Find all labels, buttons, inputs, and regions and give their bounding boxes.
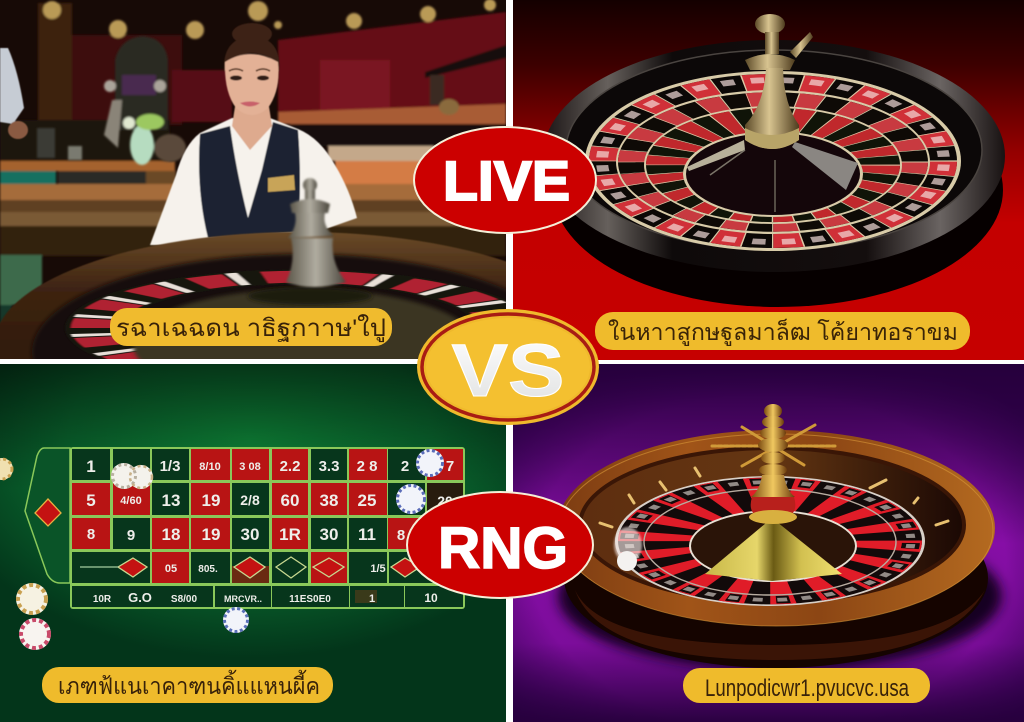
hair — [232, 22, 272, 41]
wheel base — [564, 488, 988, 668]
table numbers: 2.2 — [280, 458, 300, 475]
caption pill — [42, 667, 333, 703]
lamps — [43, 0, 496, 39]
panel: rng betting table on green — [0, 364, 506, 722]
dealer — [150, 23, 357, 246]
table numbers: 1/5 — [370, 563, 386, 575]
diamonds — [35, 499, 61, 526]
table numbers: 30 — [320, 525, 338, 544]
wheel shadow — [558, 522, 1002, 670]
table numbers: 30 — [241, 525, 259, 544]
caption pill — [110, 308, 392, 346]
caption pill — [683, 668, 930, 703]
table numbers: MRCVR.. — [224, 594, 262, 604]
table numbers: S8/00 — [171, 594, 198, 605]
table numbers: 3 08 — [239, 461, 261, 473]
badge: LIVE: LIVE — [443, 149, 570, 212]
table numbers: 1 — [86, 457, 96, 476]
decorative bottle stand — [37, 36, 186, 165]
table numbers: 2 — [401, 458, 409, 475]
wheel face — [585, 71, 961, 251]
badge: RNG — [407, 492, 593, 598]
table numbers: 5 — [86, 491, 96, 510]
badge: VS: VS — [452, 329, 564, 412]
caption pill: เภฑฟ้แนเาคาฑนคิ้แแหนผี้ค — [58, 670, 320, 699]
table numbers: 3.3 — [319, 458, 339, 475]
table numbers: G.O — [128, 590, 152, 605]
caption pill: ในหาาสูกษฐูลมาล็ฒ โค้ยาทอราขม — [608, 317, 958, 346]
table numbers: 10R — [93, 594, 112, 605]
shirt — [150, 118, 357, 246]
badge: RNG: RNG — [438, 516, 568, 581]
table numbers: 38 — [320, 491, 338, 510]
table numbers: 11 — [358, 525, 376, 544]
table numbers: 8 — [397, 527, 405, 544]
gold ticks — [600, 468, 948, 527]
table numbers: 2 8 — [357, 458, 377, 475]
table numbers: 9 — [127, 527, 135, 544]
table numbers: 19 — [202, 491, 220, 510]
table cells — [72, 449, 463, 607]
number ring — [95, 277, 505, 379]
wheel spindle — [286, 178, 346, 287]
caption pill — [595, 312, 970, 350]
table numbers: 20 — [437, 493, 453, 509]
table numbers: 13 — [162, 491, 180, 510]
table numbers: 8/10 — [199, 461, 221, 473]
panel: rng wheel on purple — [513, 364, 1024, 722]
table numbers: 25 — [358, 491, 376, 510]
badge: VS — [417, 309, 599, 425]
wheel face — [614, 476, 925, 606]
caption pill: รฉาเฉฉดน าธิฐกาาษ'ใปู — [116, 314, 386, 343]
table numbers: 1R — [279, 525, 301, 544]
table numbers: 11ES0E0 — [289, 594, 331, 605]
brass cone — [705, 518, 842, 581]
neck — [232, 100, 272, 150]
studio background — [0, 0, 506, 323]
background man arm — [0, 48, 28, 139]
ornate spindle — [712, 404, 835, 524]
table numbers: 60 — [281, 491, 299, 510]
panel: live wheel on red — [513, 0, 1024, 360]
table numbers: 7 — [446, 458, 454, 475]
table numbers: 10 — [424, 591, 438, 605]
table numbers: 4/60 — [120, 495, 142, 507]
wheel rim — [543, 40, 1005, 272]
vest — [199, 122, 300, 238]
table numbers: 05 — [165, 563, 177, 575]
panel: live dealer studio — [0, 0, 506, 359]
betting table — [25, 447, 465, 609]
wheel base — [553, 73, 1003, 307]
badge: LIVE — [414, 127, 596, 233]
table numbers — [86, 457, 454, 605]
table numbers: 8 — [87, 526, 95, 543]
face — [225, 54, 279, 115]
spindle — [745, 14, 813, 149]
caption pill: Lunpodicwr1.pvucvc.usa — [705, 675, 909, 702]
table numbers: 1/3 — [160, 458, 180, 475]
roulette wheel front — [0, 232, 506, 359]
wooden rim — [557, 430, 995, 626]
hub reflections — [687, 140, 858, 212]
table numbers: 18 — [162, 525, 180, 544]
table numbers: 1 — [369, 593, 375, 605]
table numbers: 19 — [202, 525, 220, 544]
casino chips — [0, 449, 444, 650]
table numbers: 2/8 — [240, 492, 260, 508]
table numbers: 805. — [198, 564, 218, 575]
